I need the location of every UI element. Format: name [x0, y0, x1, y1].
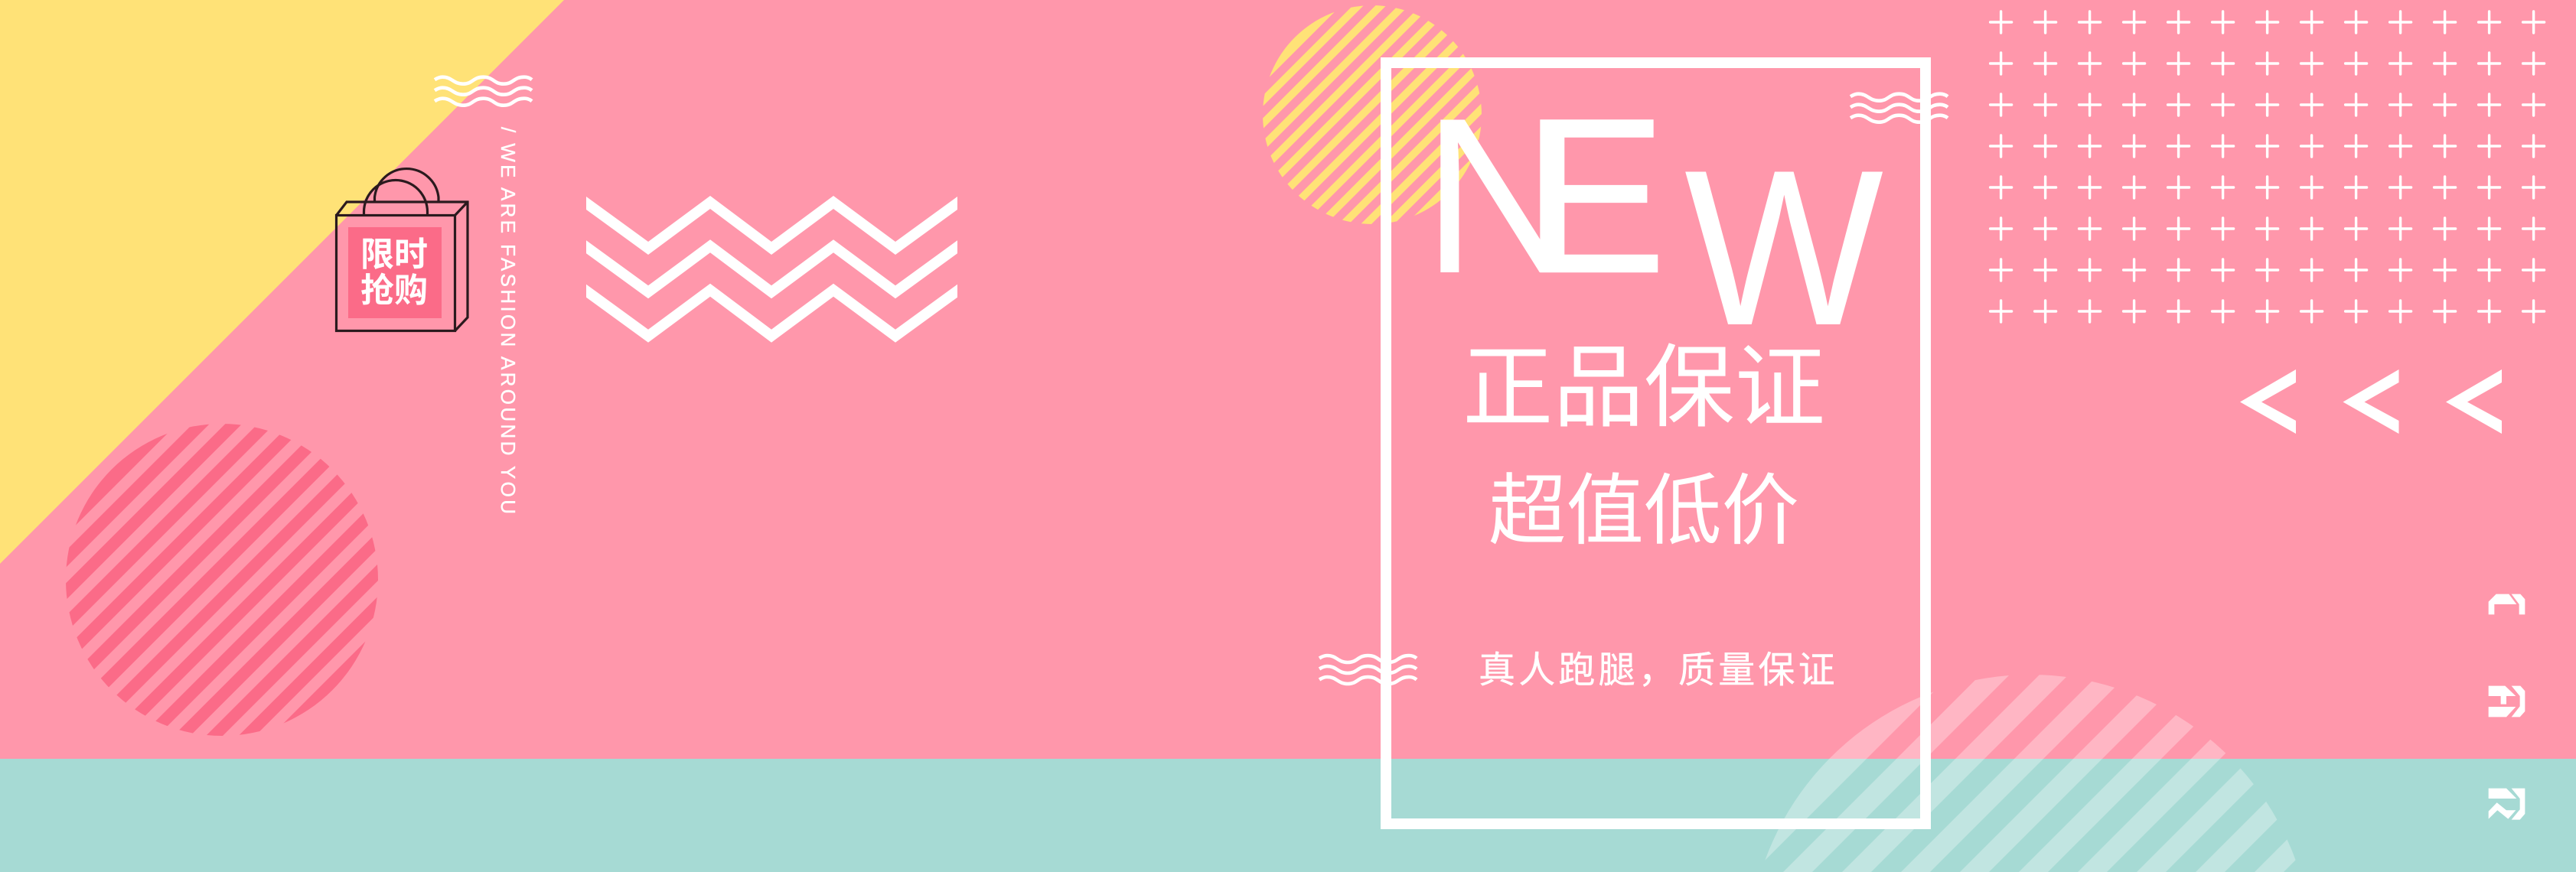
background: yellow corner triangle [0, 0, 564, 564]
heading: NEW: N [1422, 72, 1583, 320]
wave icon: bottom left of frame [1319, 656, 1417, 684]
heading: 超值低价: 超值低价 [1489, 467, 1799, 555]
heading: NEW: E [1523, 73, 1667, 319]
arrows: three left chevrons [2240, 369, 2502, 434]
subheading: 真人跑腿，质量保证: 真人跑腿，质量保证 [1479, 650, 1838, 691]
background: teal bottom band [0, 759, 2576, 872]
wave icon: top right of frame [1850, 94, 1948, 122]
heading: NEW: W [1684, 124, 1886, 372]
bag label text: 限时 [360, 236, 428, 274]
bag label panel [348, 227, 442, 318]
icon: shopping bag with label [337, 169, 468, 330]
zigzag lines [586, 196, 957, 343]
bag outline [337, 169, 468, 330]
icon: right column glyph 3 [2489, 789, 2525, 820]
vertical tagline: / WE ARE FASHION AROUND YOU [497, 127, 520, 514]
striped circle: translucent white bottom right [1765, 675, 2296, 872]
striped circle: red lower left [66, 424, 378, 736]
striped circle: yellow upper centre [1263, 5, 1482, 224]
heading: NEW [1422, 72, 1886, 372]
wave icon: top left [435, 77, 532, 106]
icon: right column glyph 1 [2489, 594, 2525, 614]
icon: right column glyph 2 [2489, 686, 2525, 717]
white rectangular frame [1381, 57, 1931, 829]
pattern: plus grid [1991, 11, 2545, 322]
icon: shopping bag with label: 抢购 [360, 272, 428, 309]
heading: 正品保证: 正品保证 [1462, 338, 1825, 439]
